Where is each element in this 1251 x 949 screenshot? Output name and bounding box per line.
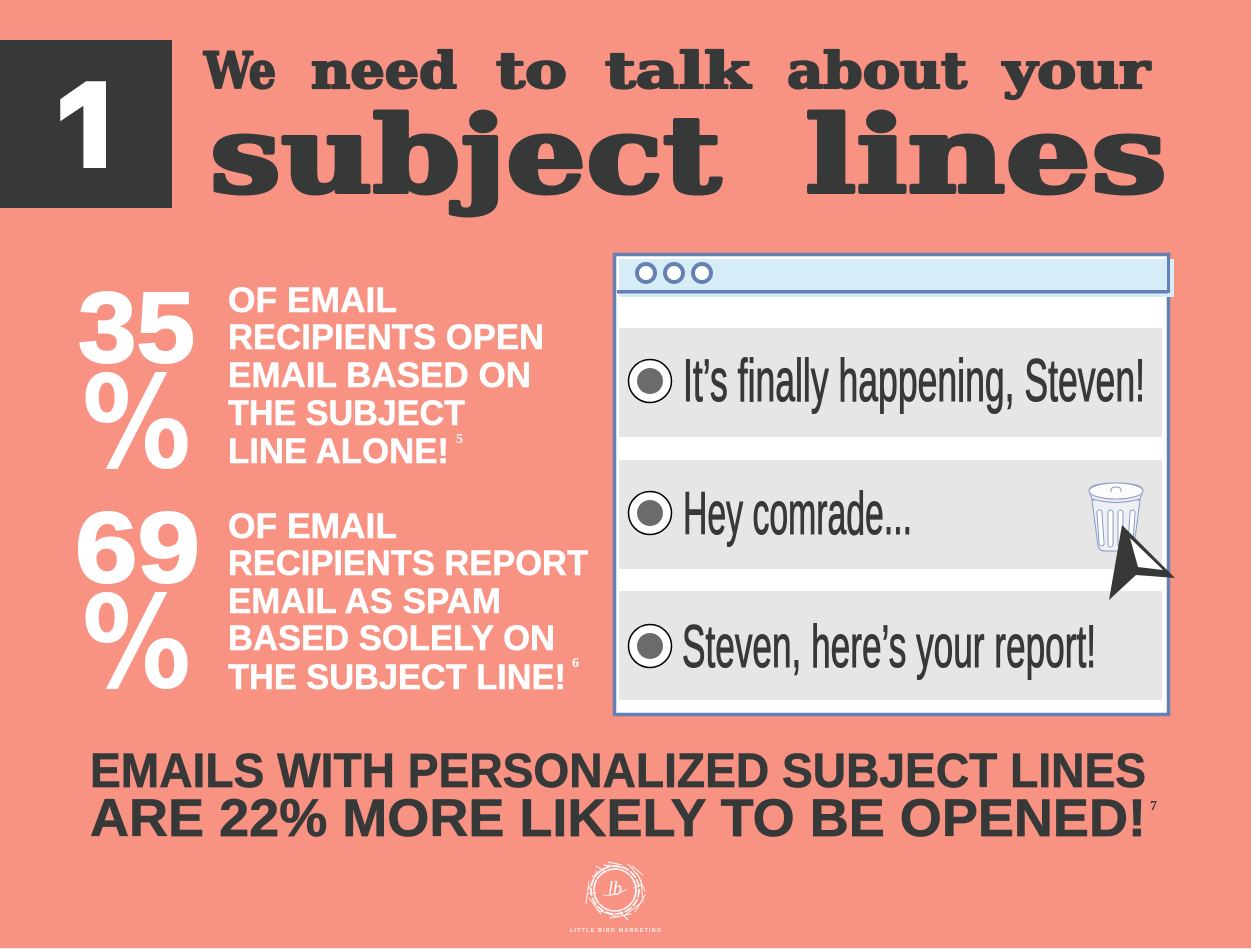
title — [203, 41, 1167, 217]
number 69: 69 — [75, 492, 200, 604]
title line 1: need — [311, 41, 457, 100]
logo wordmark: LITTLE BIRD MARKETING — [570, 928, 661, 934]
title line 1: talk — [605, 41, 752, 100]
statistic text: EMAIL AS SPAM — [228, 582, 501, 621]
statistic text: OF EMAIL — [228, 507, 397, 546]
title line 1: about — [787, 41, 967, 100]
title line 2 — [210, 92, 1167, 217]
email row 1 — [619, 328, 1162, 437]
email inbox window — [614, 254, 1174, 714]
statistic text: 5 — [456, 432, 463, 447]
statistic text: 6 — [572, 656, 579, 671]
logo: Little Bird Marketing — [570, 862, 661, 934]
statistic text: BASED SOLELY ON — [228, 619, 555, 658]
statistic text: THE SUBJECT — [228, 394, 465, 433]
statistic: 69 percent — [75, 492, 588, 718]
email row 2: Hey comrade... — [683, 480, 912, 547]
statistic text: THE SUBJECT LINE! — [228, 658, 566, 697]
monogram: lb — [608, 878, 622, 900]
footnote 7: 7 — [1150, 799, 1157, 814]
title line 1 — [203, 41, 1151, 100]
callout line 1: EMAILS WITH PERSONALIZED SUBJECT LINES — [90, 745, 1146, 798]
number 1: 1 — [53, 51, 131, 219]
percent sign: % — [82, 349, 191, 498]
statistic text — [228, 281, 544, 471]
statistic text: RECIPIENTS OPEN — [228, 318, 544, 357]
title line 1: your — [1002, 41, 1151, 100]
percent sign: % — [82, 569, 191, 718]
email row 3 — [619, 591, 1162, 700]
email row 2 — [619, 460, 1162, 569]
number 35: 35 — [78, 272, 195, 384]
number badge — [0, 40, 172, 219]
statistic text — [228, 507, 588, 697]
title line 1: to — [496, 41, 567, 100]
bottom callout — [90, 745, 1157, 848]
statistic text: OF EMAIL — [228, 281, 397, 320]
statistic text: RECIPIENTS REPORT — [228, 544, 588, 583]
window title bar — [617, 256, 1174, 297]
statistic text: EMAIL BASED ON — [228, 356, 531, 395]
wreath — [586, 862, 645, 920]
statistic: 35 percent — [78, 272, 544, 498]
statistic text: LINE ALONE! — [228, 432, 449, 471]
window buttons — [637, 264, 711, 282]
title line 2: subject — [210, 92, 721, 217]
title line 2: lines — [805, 92, 1167, 217]
title line 1: We — [203, 41, 276, 100]
icon: trash can — [1089, 483, 1143, 551]
callout line 2: ARE 22% MORE LIKELY TO BE OPENED! — [90, 789, 1146, 848]
icon: cursor arrow — [1109, 525, 1175, 600]
